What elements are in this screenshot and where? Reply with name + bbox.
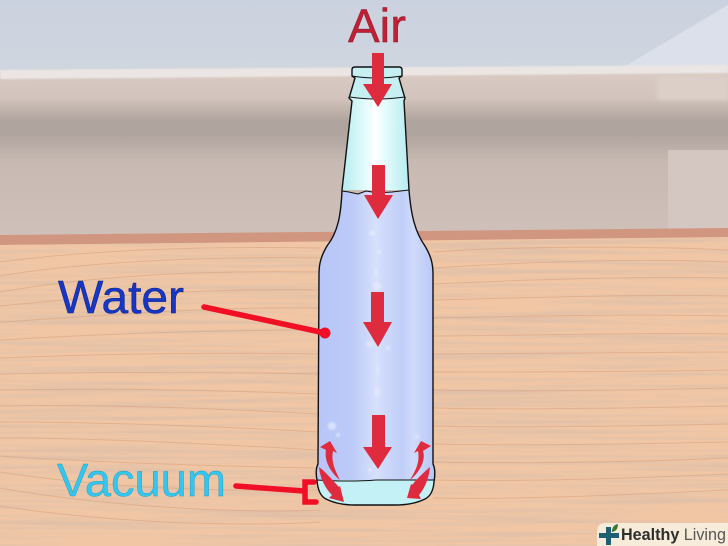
background: wooden table top <box>0 236 728 546</box>
icon: teal cross <box>599 527 619 545</box>
leader line: Vacuum bracket <box>236 482 316 502</box>
label: Vacuum: Vacuum <box>57 454 226 506</box>
logo: Healthy Living <box>597 523 728 546</box>
bottle neck tint <box>349 67 405 98</box>
logo text: Healthy Living <box>621 526 726 544</box>
icon: curved arrow right upper <box>410 441 431 480</box>
leader line: Water <box>204 307 330 338</box>
icon: down arrow mid bottle <box>363 292 392 347</box>
bottle vacuum section <box>317 480 434 505</box>
icon: down arrow at water surface <box>364 165 393 219</box>
icon: down arrow near base <box>363 415 392 469</box>
icon: green leaf <box>612 524 618 532</box>
logo background <box>597 523 728 546</box>
water sparkles <box>328 230 419 472</box>
icon: curved arrow left upper <box>320 441 340 480</box>
background: pale ledge stripe <box>0 65 728 79</box>
bottle <box>316 67 435 505</box>
bottle water section <box>316 190 435 482</box>
background: lower wall <box>0 72 728 237</box>
background: upper wall <box>0 0 728 72</box>
bottle air section <box>342 67 409 190</box>
label: Water: Water <box>58 271 184 323</box>
icon: down arrow at bottle neck <box>363 53 392 107</box>
background: table edge <box>0 228 728 245</box>
bottle outline <box>316 67 435 505</box>
icon: curved arrow right lower <box>407 467 430 499</box>
label: Air: Air <box>348 0 406 52</box>
icon: curved arrow left lower <box>319 467 344 502</box>
